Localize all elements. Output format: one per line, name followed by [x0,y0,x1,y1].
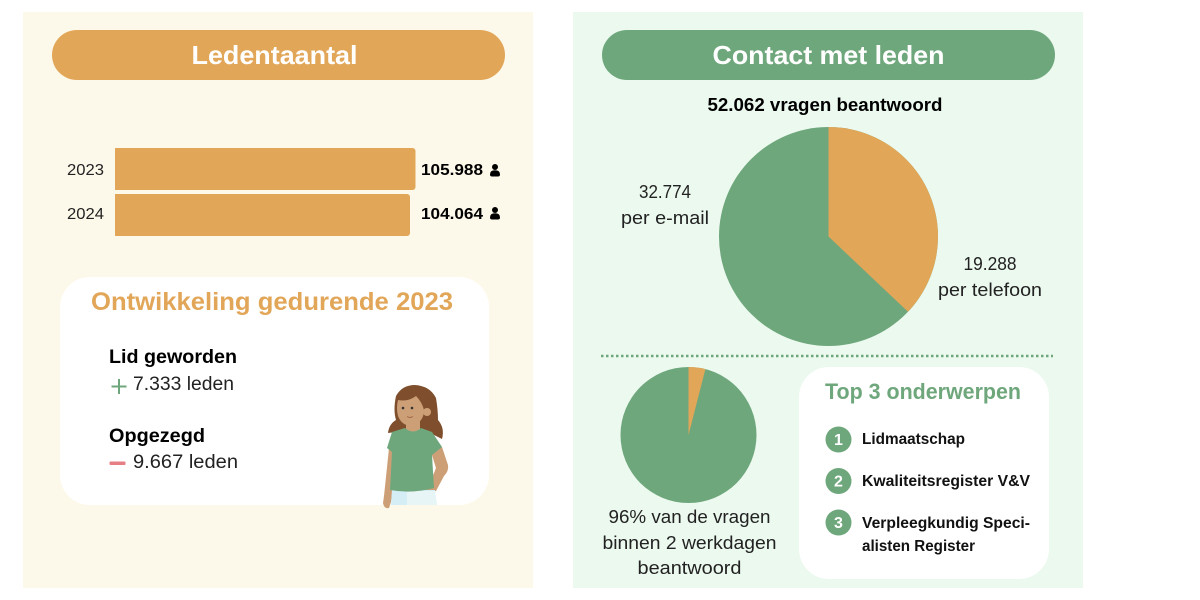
card: ontwikkeling gedurende 2023 [60,277,489,508]
bar chart: ledentaantal per jaar: 104.064 [421,206,483,223]
icon: minus [110,462,126,465]
label: per telefoon: per telefoon [938,279,1042,300]
item 3 [826,510,1030,555]
icon: person 2024 [490,207,500,220]
text: opgezegd [109,426,238,473]
panel: contact met leden [573,12,1083,588]
label: per e-mail [621,181,709,228]
card heading: Top 3 onderwerpen [825,379,1021,404]
bar chart: ledentaantal per jaar: 105.988 [421,162,483,179]
item 2 [826,468,1030,494]
heading: contact met leden [602,30,1055,80]
item 1: 1 [834,432,843,449]
text: lid geworden [109,347,237,395]
text: vragen beantwoord: 52.062 vragen beantwoord [708,95,942,115]
card heading: Ontwikkeling gedurende 2023 [91,288,453,316]
label: per e-mail: per e-mail [621,207,709,228]
text: opgezegd: 9.667 leden [133,452,238,473]
text: 96% beantwoord: beantwoord [638,557,742,578]
text: lid geworden: Lid geworden [109,347,237,368]
item 2: 2 [834,474,843,490]
illustration: woman [383,385,448,508]
text: 96% beantwoord: 96% van de vragen [608,506,770,527]
icon: plus [112,379,126,394]
item 1: Lidmaatschap [862,431,965,448]
icon: person 2023 [490,164,500,176]
pie chart: e-mail en telefoon [719,127,938,346]
text: opgezegd: Opgezegd [109,426,205,447]
label: per telefoon: 19.288 [964,253,1016,274]
bar chart: ledentaantal per jaar: 2023 [67,162,104,179]
text: 96% beantwoord: binnen 2 werkdagen [602,532,776,553]
item 1 [826,426,965,452]
item 3: Verpleegkundig Speci- [862,515,1030,532]
bar chart: ledentaantal per jaar [67,148,500,236]
label: per e-mail: 32.774 [639,181,691,202]
text: lid geworden: 7.333 leden [133,374,234,395]
heading: contact met leden: Contact met leden [712,40,944,70]
heading: ledentaantal: Ledentaantal [192,40,358,70]
item 3: 3 [834,515,843,532]
heading: ledentaantal [52,30,505,80]
card: top 3 onderwerpen [799,367,1049,579]
text: 96% beantwoord [602,506,776,578]
panel: ledentaantal [23,12,533,588]
pie chart: binnen 2 werkdagen [620,367,756,503]
bar chart: ledentaantal per jaar: 2024 [67,206,104,223]
label: per telefoon [938,253,1042,300]
item 2: Kwaliteitsregister V&V [862,473,1030,490]
item 3: alisten Register [862,538,975,555]
